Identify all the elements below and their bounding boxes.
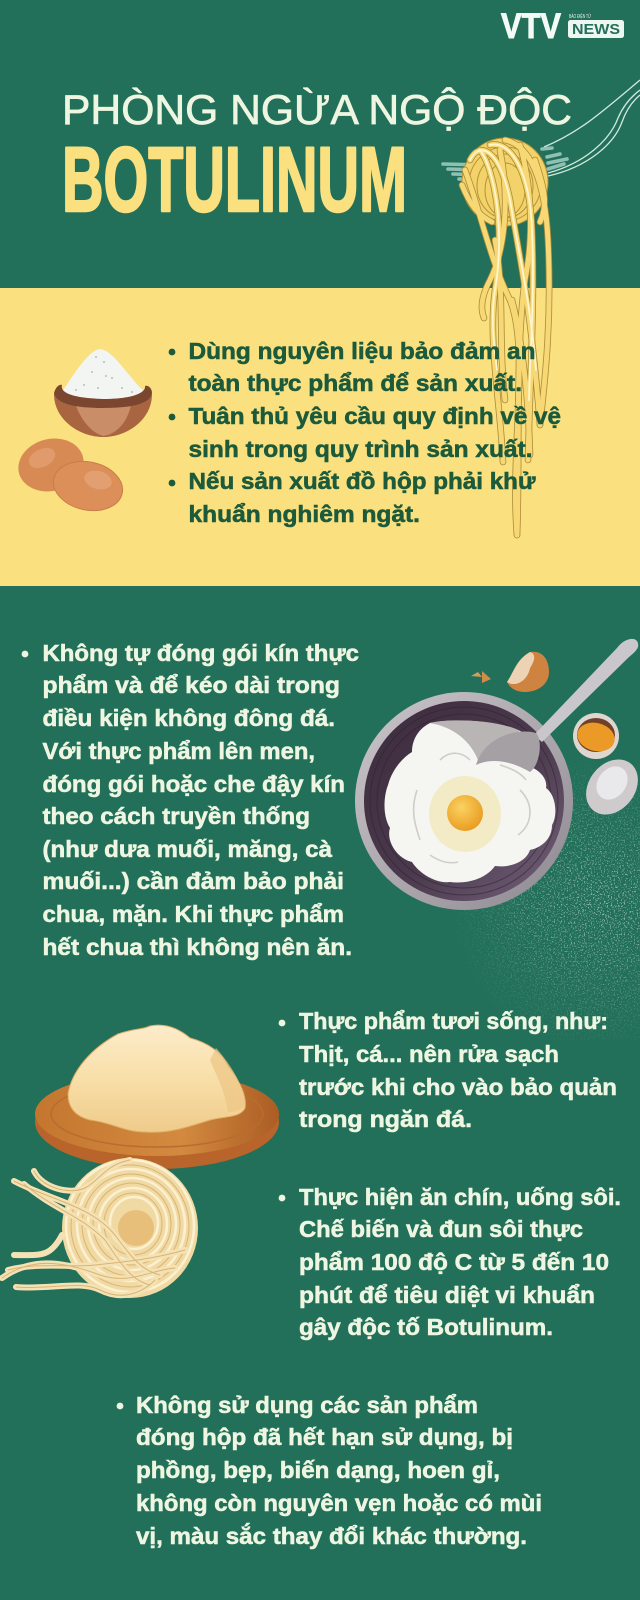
icon: flour bowl	[54, 349, 152, 437]
logo: VTV News: NEWS	[572, 21, 620, 38]
text block: raw food: trước khi cho vào bảo quản	[299, 1074, 617, 1100]
text block: production rules: toàn thực phẩm để sản xuất.	[188, 370, 522, 396]
text block: packaging and fermented food: hết chua thì không nên ăn.	[42, 934, 352, 960]
text block: raw food	[279, 1008, 617, 1132]
icon: dough on wooden board	[35, 1025, 279, 1169]
text block: production rules: Tuân thủ yêu cầu quy định về vệ	[188, 403, 561, 429]
icon: white egg	[575, 749, 640, 825]
text block: packaging and fermented food: muối...) cần đảm bảo phải	[42, 868, 344, 894]
text block: cook thoroughly: Chế biến và đun sôi thực	[299, 1216, 583, 1242]
text block: cook thoroughly: phút để tiêu diệt vi khuẩn	[299, 1282, 595, 1308]
icon: mixing pan with egg and flour	[355, 639, 638, 910]
text block: production rules: Nếu sản xuất đồ hộp phải khử	[188, 468, 536, 494]
icon: noodles on fork	[462, 138, 549, 535]
text block: canned products: không còn nguyên vẹn hoặc có mùi	[136, 1490, 542, 1516]
text block: packaging and fermented food: theo cách truyền thống	[42, 803, 310, 829]
icon: noodle nest	[2, 1158, 198, 1298]
text block: packaging and fermented food: điều kiện không đông đá.	[42, 705, 335, 731]
title	[62, 86, 572, 231]
text block: cook thoroughly: Thực hiện ăn chín, uống sôi.	[299, 1184, 621, 1210]
text block: canned products: đóng hộp đã hết hạn sử dụng, bị	[136, 1424, 513, 1450]
text block: cook thoroughly	[279, 1184, 621, 1340]
flour dust	[400, 720, 640, 1040]
icon: egg shell pieces	[471, 652, 549, 692]
text block: cook thoroughly: gây độc tố Botulinum.	[299, 1314, 553, 1340]
icon: fork	[443, 80, 640, 180]
panel: yellow band	[0, 288, 640, 586]
text block: production rules: khuẩn nghiêm ngặt.	[188, 501, 420, 527]
text block: packaging and fermented food: (như dưa muối, măng, cà	[42, 836, 332, 862]
title: PHÒNG NGỪA NGỘ ĐỘC	[62, 86, 572, 133]
icon: cracked egg with yolk	[573, 713, 619, 759]
text block: packaging and fermented food: Với thực phẩm lên men,	[42, 738, 315, 764]
text block: canned products	[117, 1392, 542, 1549]
text block: canned products: vị, màu sắc thay đổi khác thường.	[136, 1522, 527, 1549]
text block: raw food: Thịt, cá... nên rửa sạch	[299, 1041, 559, 1067]
logo: VTV News: VTV	[501, 7, 562, 46]
text block: cook thoroughly: phẩm 100 độ C từ 5 đến 10	[299, 1249, 609, 1275]
text block: packaging and fermented food: đóng gói hoặc che đậy kín	[42, 771, 345, 797]
icon: eggs	[13, 432, 127, 517]
logo: VTV News: BÁO ĐIỆN TỬ	[569, 12, 591, 20]
text block: canned products: phồng, bẹp, biến dạng, hoen gỉ,	[136, 1457, 500, 1483]
text block: packaging and fermented food: phẩm và để kéo dài trong	[42, 672, 340, 698]
spoon	[476, 639, 638, 772]
text block: production rules: Dùng nguyên liệu bảo đảm an	[188, 338, 536, 364]
logo: VTV News	[501, 7, 624, 46]
text block: raw food: trong ngăn đá.	[299, 1106, 472, 1132]
text block: raw food: Thực phẩm tươi sống, như:	[299, 1008, 608, 1034]
text block: canned products: Không sử dụng các sản phẩm	[136, 1392, 478, 1418]
text block: packaging and fermented food: Không tự đóng gói kín thực	[42, 640, 359, 666]
title: BOTULINUM	[62, 129, 407, 231]
text block: packaging and fermented food	[22, 640, 359, 960]
text block: packaging and fermented food: chua, mặn. Khi thực phẩm	[42, 901, 344, 927]
text block: production rules	[169, 338, 561, 527]
text block: production rules: sinh trong quy trình sản xuất.	[188, 436, 532, 462]
